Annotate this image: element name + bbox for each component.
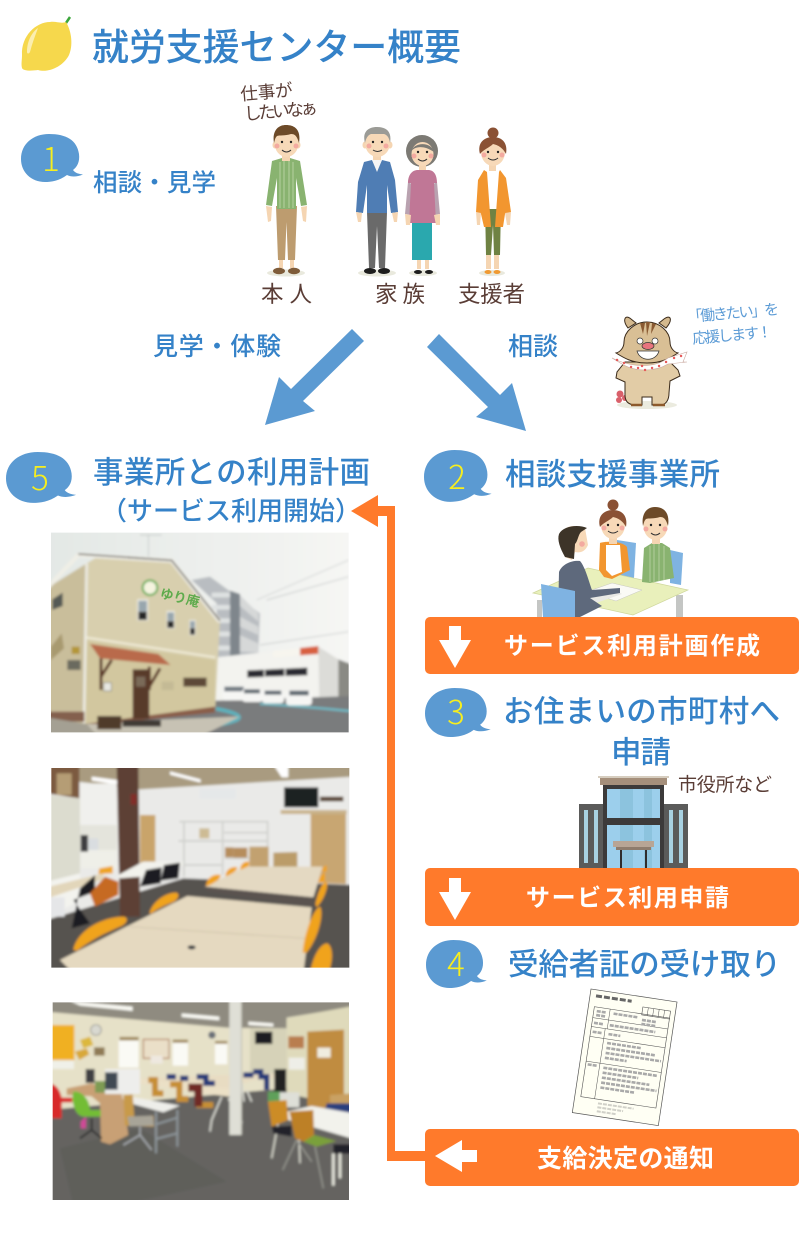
step 3 bubble <box>425 686 491 737</box>
step 5 bubble <box>6 452 76 503</box>
illustration: city hall <box>579 776 688 868</box>
figure: mother <box>405 135 440 276</box>
figure: person <box>266 125 307 276</box>
photo: classroom with long tables <box>47 763 353 973</box>
bar: notification <box>425 1129 799 1186</box>
label: family: 家 族 <box>375 282 425 307</box>
step 4 bubble <box>426 938 487 988</box>
step 3 heading <box>503 695 780 770</box>
speech text: wants to work <box>239 78 319 124</box>
step 1 label: 相談・見学 <box>93 169 216 197</box>
step 5 bubble: 5 <box>31 452 49 500</box>
step 2 bubble: 2 <box>448 451 466 499</box>
mascot speech text: 応援します！ <box>692 324 773 348</box>
label: supporter: 支援者 <box>458 282 525 307</box>
mascot: boar <box>612 317 687 409</box>
orange flow arrow <box>351 495 430 1161</box>
speech text: wants to work: したいなぁ <box>243 98 319 124</box>
mascot speech text: 「働きたい」を <box>687 301 780 326</box>
label: self: 本 人 <box>261 282 312 307</box>
arrow: to office <box>265 329 364 425</box>
speech text: wants to work: 仕事が <box>239 80 294 104</box>
step 5 heading: 事業所との利用計画 <box>93 456 370 490</box>
title: 就労支援センター概要 <box>92 27 461 68</box>
step 3 bubble: 3 <box>447 686 465 734</box>
step 4 bubble: 4 <box>447 938 465 986</box>
bar: create service plan: サービス利用計画作成 <box>504 633 760 660</box>
label: city hall etc: 市役所など <box>678 774 772 796</box>
bar: apply for service <box>425 868 799 926</box>
step 5 heading <box>93 456 370 526</box>
step 4 heading: 受給者証の受け取り <box>508 948 781 982</box>
photo: building exterior: ゆり庵 <box>159 585 202 610</box>
step 3 heading: 申請 <box>611 736 671 770</box>
mascot speech text <box>687 301 782 348</box>
bar: create service plan <box>425 617 799 674</box>
step 1 bubble: 1 <box>42 133 60 181</box>
step 1 bubble <box>21 133 83 182</box>
step 3 heading: お住まいの市町村へ <box>503 695 780 729</box>
photo: building exterior <box>47 528 353 737</box>
step 2 heading: 相談支援事業所 <box>505 458 720 492</box>
step 5 heading: （サービス利用開始） <box>101 496 361 526</box>
icon: lemon <box>22 17 71 71</box>
figure: father <box>356 127 398 276</box>
photo: workspace with desks <box>47 998 353 1205</box>
label: consultation: 相談 <box>508 333 558 361</box>
bar: notification: 支給決定の通知 <box>537 1145 714 1173</box>
label: visit and trial: 見学・体験 <box>153 333 281 361</box>
arrow: to consultation <box>427 334 526 431</box>
illustration: consultation meeting <box>533 500 688 618</box>
illustration: certificate document <box>572 989 677 1126</box>
step 2 bubble <box>424 450 492 502</box>
figure: supporter <box>476 128 511 276</box>
bar: apply for service: サービス利用申請 <box>526 885 729 912</box>
